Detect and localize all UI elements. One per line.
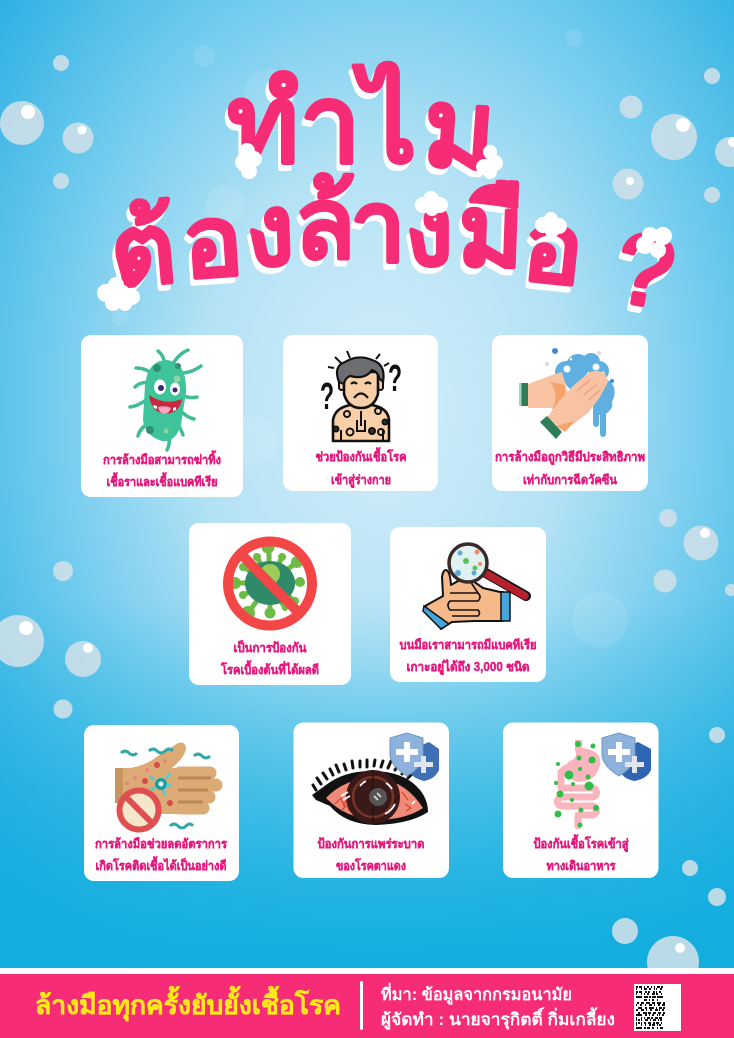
footer credits: ผู้จัดทำ : นายจารุกิตติ์ กิ่มเกลี้ยง xyxy=(381,1007,615,1031)
title: pink letters: า xyxy=(350,171,406,283)
title: white shadow xyxy=(103,69,679,336)
icon: digestive tract with germs xyxy=(554,740,600,828)
title: white shadow: ม xyxy=(416,72,497,199)
icon: hand with rash and no sign xyxy=(115,743,216,830)
caption: ทางเดินอาหาร xyxy=(546,859,616,873)
card 1: kills fungi and bacteria xyxy=(81,335,243,497)
card 7: prevents pink eye xyxy=(294,722,449,878)
icon: green germ xyxy=(130,350,201,450)
QR code xyxy=(634,984,681,1031)
caption xyxy=(495,450,645,487)
title: white shadow: อ xyxy=(176,190,243,306)
icon: no virus sign xyxy=(228,540,312,626)
title: pink letters: ไ xyxy=(353,63,417,186)
caption: เท่ากับการฉีดวัคซีน xyxy=(523,473,617,487)
caption: โรคเบื้องต้นที่ได้ผลดี xyxy=(220,660,319,677)
card 5: 3,000 kinds of bacteria on hands xyxy=(390,527,546,682)
title: pink letters: ง xyxy=(243,174,296,288)
caption xyxy=(318,837,424,873)
caption: การล้างมือช่วยลดอัตราการ xyxy=(95,837,227,851)
icon: question marks xyxy=(320,358,402,418)
title: pink letters: อ xyxy=(179,184,246,300)
caption: เชื้อราและเชื้อแบคทีเรีย xyxy=(106,472,218,489)
caption: ป้องกันการแพร่ระบาด xyxy=(318,837,424,851)
card 3: hand washing equals vaccine xyxy=(492,335,648,491)
title: pink letters: ต้ xyxy=(106,192,180,309)
icon: medical shields xyxy=(602,733,651,781)
icon: medical shields xyxy=(390,733,439,781)
title: pink letters: ทำ xyxy=(227,63,361,186)
caption: การล้างมือสามารถฆ่าทิ้ง xyxy=(103,450,221,467)
caption xyxy=(103,450,221,489)
icon: question marks: ? xyxy=(320,376,334,418)
caption: การล้างมือถูกวิธีมีประสิทธิภาพ xyxy=(495,450,645,465)
caption xyxy=(220,640,319,677)
title: white shadow: ล้ xyxy=(291,174,353,286)
caption xyxy=(316,447,406,488)
card 4: prevents basic infections xyxy=(189,523,351,685)
icon: infected eye xyxy=(312,760,428,825)
title: white shadow: ง xyxy=(402,181,450,293)
title: pink letters: ล้ xyxy=(294,168,356,280)
title: white shadow: อ xyxy=(515,195,586,313)
caption: ป้องกันเชื้อโรคเข้าสู่ xyxy=(534,834,629,852)
icon: worried man with rash xyxy=(328,351,389,441)
title: white shadow: ง xyxy=(240,180,293,294)
caption: เกาะอยู่ได้ถึง 3,000 ชนิด xyxy=(406,659,530,675)
caption: บนมือเราสามารถมีแบคทีเรีย xyxy=(400,638,536,652)
card 6: reduces infection rate xyxy=(84,725,239,881)
title: pink letters: ง xyxy=(405,175,453,287)
caption xyxy=(534,834,629,873)
title: pink letters: ม xyxy=(419,66,500,193)
title: white shadow: า xyxy=(347,177,403,289)
icon: washing hands with soap xyxy=(519,348,615,439)
card 8: prevents germs in digestive tract xyxy=(503,722,658,878)
icon: question marks: ? xyxy=(388,358,402,400)
footer credits: ที่มา: ข้อมูลจากกรมอนามัย xyxy=(381,982,572,1006)
caption: เกิดโรคติดเชื้อได้เป็นอย่างดี xyxy=(96,856,226,873)
foam clusters on title xyxy=(97,143,672,311)
caption: ช่วยป้องกันเชื้อโรค xyxy=(316,447,406,464)
caption xyxy=(95,837,227,873)
card 2: prevents germs entering body xyxy=(283,335,438,491)
title: pink letters xyxy=(106,63,682,330)
title: pink letters: มื xyxy=(456,175,526,289)
caption: เข้าสู่ร่างกาย xyxy=(331,473,391,488)
footer band xyxy=(0,968,734,1038)
caption: ของโรคตาแดง xyxy=(336,858,406,873)
icon: magnifier on hands xyxy=(423,544,526,629)
title: pink letters: ? xyxy=(608,211,682,330)
title: white shadow: ต้ xyxy=(103,198,177,315)
caption xyxy=(400,638,536,675)
title: pink letters: อ xyxy=(518,189,589,307)
title: white shadow: ไ xyxy=(350,69,414,192)
title: white shadow: ทำ xyxy=(224,69,358,192)
title: white shadow: ? xyxy=(605,217,679,336)
title: white shadow: มื xyxy=(453,181,523,295)
footer credits xyxy=(381,982,615,1031)
footer slogan: ล้างมือทุกครั้งยับยั้งเชื้อโรค xyxy=(35,985,341,1022)
caption: เป็นการป้องกัน xyxy=(234,640,307,655)
